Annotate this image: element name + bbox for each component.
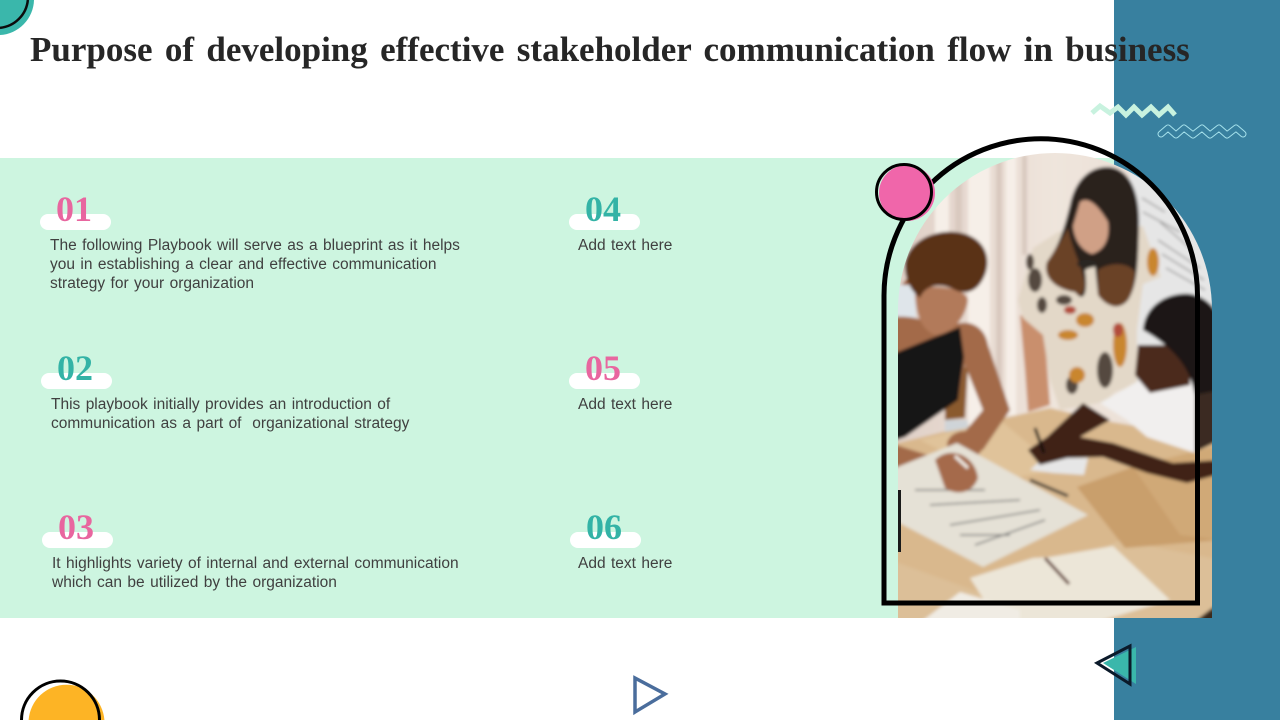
icon: mint zigzag bbox=[1090, 103, 1177, 118]
item 01: The following Playbook will serve as a blueprint as it helps bbox=[50, 237, 460, 254]
small note bbox=[1030, 458, 1088, 475]
big paper bbox=[890, 443, 1088, 567]
seated woman right shirt bbox=[1100, 378, 1195, 453]
standing woman face bbox=[1073, 200, 1108, 254]
item 03: which can be utilized by the organization bbox=[52, 574, 337, 591]
icon: teal corner circle bbox=[0, 0, 34, 35]
item 03: 03 bbox=[58, 507, 94, 547]
seated woman right arms bbox=[1028, 403, 1220, 483]
envelope bbox=[1077, 467, 1220, 548]
table bbox=[898, 406, 1212, 593]
item 04: 04 bbox=[585, 189, 621, 229]
standing woman dress bbox=[1018, 226, 1161, 410]
chair and back elements bbox=[945, 365, 968, 420]
pens bbox=[1035, 428, 1044, 453]
panel: blue side bar bbox=[1114, 0, 1280, 720]
photo: three women working at a table bbox=[898, 153, 1212, 618]
item 02 bbox=[41, 348, 410, 432]
item 01 bbox=[40, 189, 460, 292]
item 06: Add text here bbox=[578, 555, 672, 572]
item 04 bbox=[569, 189, 672, 254]
notebook bbox=[970, 546, 1170, 625]
sliver on left bbox=[898, 490, 901, 552]
item 06 bbox=[570, 507, 672, 572]
item 05: 05 bbox=[585, 348, 621, 388]
title: Purpose of developing effective stakeholder communication flow in business bbox=[30, 30, 1190, 69]
panel: mint content band bbox=[0, 158, 1114, 618]
item 02: This playbook initially provides an introduction of bbox=[51, 396, 390, 413]
icon: outlined blue zigzag bbox=[1158, 124, 1246, 139]
item 01: you in establishing a clear and effective communication bbox=[50, 256, 437, 273]
item 04: Add text here bbox=[578, 237, 672, 254]
item 05 bbox=[569, 348, 672, 413]
item 05: Add text here bbox=[578, 396, 672, 413]
item 03 bbox=[42, 507, 459, 591]
standing woman hair bbox=[1046, 167, 1139, 306]
item 02: communication as a part of organizational strategy bbox=[51, 415, 409, 432]
item 01: 01 bbox=[56, 189, 92, 229]
item 06: 06 bbox=[586, 507, 622, 547]
writing hand bbox=[935, 453, 978, 492]
bottom paper bbox=[923, 590, 1019, 618]
item 03: It highlights variety of internal and external communication bbox=[52, 555, 459, 572]
seated woman left bbox=[890, 317, 1010, 450]
seated woman right face and hair bbox=[1135, 345, 1190, 393]
item 01: strategy for your organization bbox=[50, 275, 254, 292]
standing woman arm bbox=[1020, 315, 1050, 412]
item 02: 02 bbox=[57, 348, 93, 388]
wall and curtain bbox=[898, 153, 1132, 444]
